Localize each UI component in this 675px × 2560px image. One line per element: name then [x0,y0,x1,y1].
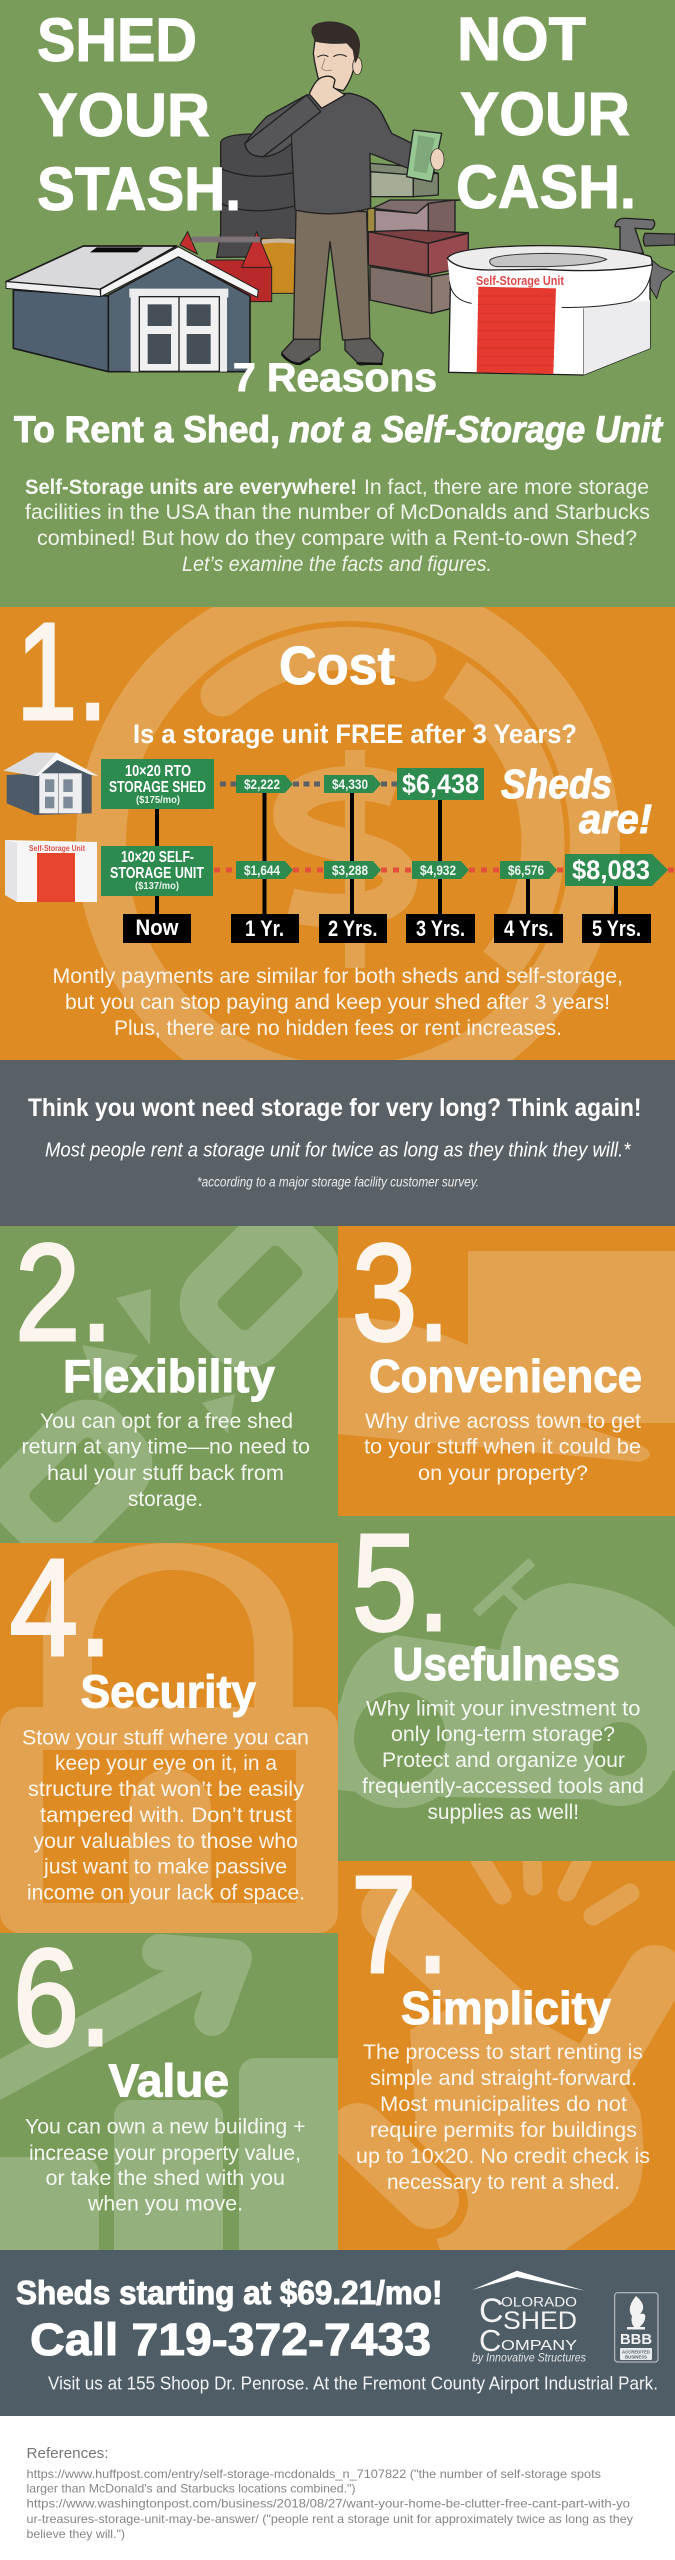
security text: structure that won’t be easily [28,1777,304,1801]
number 1: 1. [16,595,108,749]
usefulness text: Protect and organize your [382,1748,625,1772]
usefulness text [362,1696,644,1824]
intro text: combined! But how do they compare with a Rent-to-own Shed? [37,527,637,550]
label box: self-storage unit: 10×20 SELF- [121,849,194,866]
simplicity text: up to 10x20. No credit check is [356,2144,650,2168]
security text: just want to make passive [43,1854,287,1878]
references: ur-treasures-storage-unit-may-be-answer/ ("people rent a storage unit for approximately twice as long as they [26,2512,633,2526]
illustration: self-storage unit [447,218,675,375]
usefulness text: frequently-accessed tools and [362,1774,644,1798]
flexibility text [22,1409,310,1511]
subtitle: 7 reasons: 7 Reasons [233,356,437,400]
price tags: storage row: $1,644 [244,862,280,878]
heading: security: Security [80,1666,256,1718]
security text: your valuables to those who [34,1829,298,1853]
logo: colorado shed company: OLORADO [501,2294,577,2310]
background icon: arrow truck shape [338,1251,675,1462]
intro text: Self-Storage units are everywhere! [25,476,357,499]
number 2: 2. [15,1216,113,1370]
price tags: shed row: $4,330 [332,776,368,792]
callout: sheds are: Sheds [501,761,612,807]
cost text [52,964,623,1040]
title: shed your stash: STASH. [37,155,241,223]
panel: hero header [0,0,675,607]
background icon: dollar coin [101,596,595,1090]
number 5: 5. [352,1506,450,1660]
illustration: barrels [217,134,297,257]
convenience text: Why drive across town to get [365,1409,641,1433]
icon: small shed [3,753,98,815]
timeline connector lines [157,793,616,914]
price tags: shed row: $6,438 [402,769,479,799]
number 7: 7. [351,1848,449,2002]
label box: RTO storage shed: 10×20 RTO [125,763,191,780]
price tags: storage row: $4,932 [420,862,456,878]
year labels [123,914,651,943]
security text: income on your lack of space. [27,1880,305,1904]
cost text: Plus, there are no hidden fees or rent increases. [114,1016,562,1040]
intro text: facilities in the USA than the number of McDonalds and Starbucks [25,501,650,524]
logo: colorado shed company: C [479,2323,501,2358]
value text: or take the shed with you [46,2166,285,2190]
intro text [25,476,650,576]
panel: think again callout [0,1060,675,1227]
security text: keep your eye on it, in a [55,1751,277,1775]
year labels: 4 Yrs. [504,916,554,941]
year labels: 2 Yrs. [328,916,378,941]
cost text: but you can stop paying and keep your shed after 3 years! [65,990,610,1014]
label box: RTO storage shed: STORAGE SHED [109,779,206,796]
cost timeline chart [3,753,675,943]
heading: cost: Cost [279,636,395,696]
heading: convenience: Convenience [369,1350,642,1402]
value text [25,2114,306,2216]
flexibility text: storage. [128,1487,203,1511]
simplicity text [356,2040,650,2194]
title: not your cash: CASH. [456,153,636,221]
value text: increase your property value, [29,2141,301,2165]
price tags: storage row: $8,083 [572,855,650,885]
label box: RTO storage shed [101,759,214,809]
simplicity text: require permits for buildings [370,2118,637,2142]
background icon: broken chain [0,1216,332,1552]
price tags: storage row: $3,288 [332,862,368,878]
panel: footer call to action [0,2250,675,2416]
year labels: Now [136,915,179,940]
panel: think again callout: *according to a major storage facility customer survey. [197,1174,479,1190]
phone number: Call 719-372-7433 [30,2314,431,2365]
usefulness text: supplies as well! [428,1800,579,1824]
title: shed your stash [37,6,241,223]
references: larger than McDonald's and Starbucks locations combined.") [26,2482,355,2496]
logo: colorado shed company: SHED [503,2307,577,2335]
logo: BBB accredited business: BUSINESS [625,2354,647,2360]
year labels: 5 Yrs. [592,916,641,941]
number 6: 6. [13,1921,112,2075]
logo: colorado shed company: C [479,2292,504,2330]
heading: value: Value [108,2054,229,2106]
question: Is a storage unit FREE after 3 Years? [133,719,577,749]
title: shed your stash: SHED [37,6,197,74]
background icon: rising arrow and bars [0,1952,359,2277]
number 3: 3. [352,1216,450,1370]
security text [22,1726,309,1904]
panel: 6 value [0,1933,338,2250]
year labels: 1 Yr. [245,916,284,941]
icon: small self-storage unit: Self-Storage Unit [29,844,85,853]
usefulness text: Why limit your investment to [366,1696,641,1720]
intro text: Let’s examine the facts and figures. [182,553,492,576]
title: not your cash [456,5,636,221]
logo: BBB accredited business: BBB [620,2331,652,2348]
icon: small self-storage unit [5,840,97,902]
title: shed your stash: YOUR [38,81,210,149]
references: believe they will.") [26,2527,125,2541]
price headline: Sheds starting at $69.21/mo! [16,2274,442,2311]
heading: usefulness: Usefulness [392,1638,620,1690]
panel: 5 usefulness [338,1506,675,1861]
illustration: bucket and toolbox [180,232,298,302]
callout: sheds are: are! [579,796,652,842]
usefulness text: only long-term storage? [391,1722,615,1746]
subtitle: 7 reasons: To Rent a Shed, [14,409,280,450]
illustration: self-storage unit: Self-Storage Unit [476,274,565,288]
cost text: Montly payments are similar for both sheds and self-storage, [52,964,623,988]
simplicity text: necessary to rent a shed. [387,2170,620,2194]
label box: self-storage unit [101,846,213,896]
panel: 1 cost [0,595,675,1090]
logo: colorado shed company: OMPANY [501,2338,577,2354]
intro text: In fact, there are more storage [364,476,649,499]
title: not your cash: YOUR [460,80,630,148]
dotted line: storage cost [214,868,675,872]
panel: 4 security [0,1531,338,1933]
convenience text [364,1409,641,1485]
price tags: shed row: $2,222 [244,776,280,792]
references [26,2445,633,2541]
label box: self-storage unit: STORAGE UNIT [110,865,204,882]
illustration: thinking man holding cash [245,21,444,365]
references: References: [26,2445,109,2462]
simplicity text: simple and straight-forward. [370,2066,637,2090]
background icon: padlock [0,1543,338,1933]
background icon: hand pressing [355,1858,655,2250]
references: https://www.washingtonpost.com/business/2018/08/27/want-your-home-be-clutter-free-cant-part-with-yo [26,2497,630,2511]
flexibility text: return at any time—no need to [22,1434,310,1458]
panel: 3 convenience [338,1216,675,1516]
security text: Stow your stuff where you can [22,1726,309,1750]
panel: 7 simplicity [338,1848,675,2250]
price tags: storage row: $6,576 [508,862,544,878]
callout: sheds are [501,761,652,842]
convenience text: to your stuff when it could be [364,1434,641,1458]
subtitle: 7 reasons [14,356,664,450]
logo: colorado shed company [472,2271,586,2365]
background icon: wheelbarrow tool [338,1562,675,1800]
illustration: shed [6,246,258,372]
heading: flexibility: Flexibility [63,1350,275,1402]
price tags: storage row [236,854,668,886]
simplicity text: The process to start renting is [363,2040,643,2064]
dotted line: shed cost [220,782,397,786]
references: https://www.huffpost.com/entry/self-storage-mcdonalds_n_7107822 ("the number of self-storage spots [26,2467,601,2481]
logo: colorado shed company: by Innovative Structures [472,2353,586,2365]
simplicity text: Most municipalites do not [380,2092,627,2116]
panel: 2 flexibility [0,1216,338,1552]
logo: BBB accredited business [615,2293,658,2362]
heading: simplicity: Simplicity [401,1982,611,2034]
year labels: 3 Yrs. [416,916,465,941]
value text: when you move. [87,2192,243,2216]
security text: tampered with. Don’t trust [40,1803,292,1827]
price tags: shed row [236,768,484,800]
convenience text: on your property? [418,1461,588,1485]
title: not your cash: NOT [457,5,586,73]
flexibility text: haul your stuff back from [47,1461,284,1485]
illustration: stacked boxes [368,163,468,313]
value text: You can own a new building + [25,2114,306,2138]
flexibility text: You can opt for a free shed [40,1409,293,1433]
logo: BBB accredited business: ACCREDITED [622,2350,651,2354]
label box: self-storage unit: ($137/mo) [135,880,179,892]
label box: RTO storage shed: ($175/mo) [136,794,180,806]
number 4: 4. [10,1531,112,1685]
